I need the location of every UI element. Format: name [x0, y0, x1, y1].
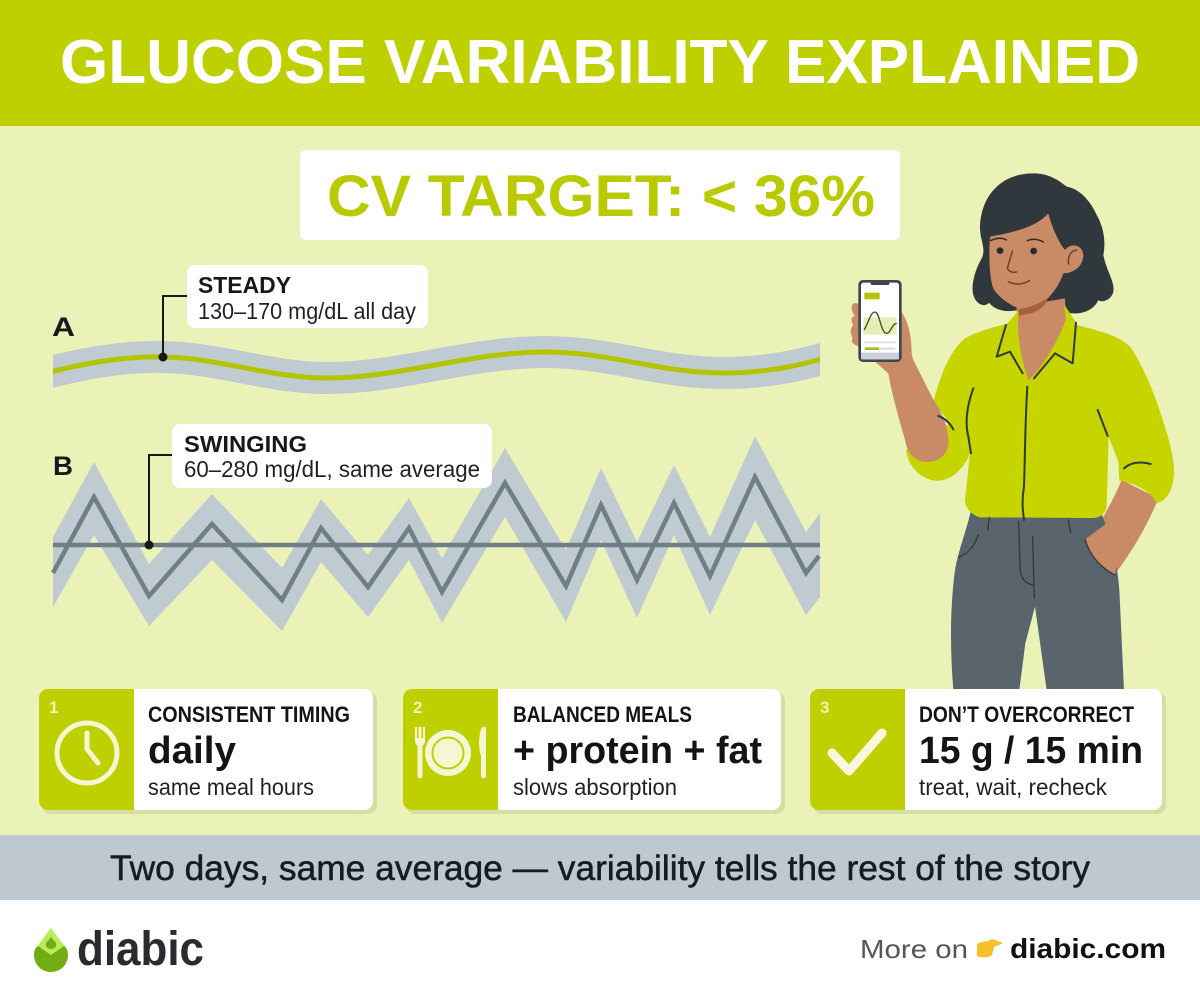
facial features [991, 238, 1077, 284]
card 3: don't overcorrect: DON’T OVERCORRECT [919, 702, 1134, 727]
right forearm [1088, 480, 1158, 572]
callout: swinging: SWINGING [184, 431, 307, 457]
connector A [163, 296, 187, 357]
face [989, 213, 1083, 308]
swinging line [53, 477, 819, 600]
icon: pointing hand [977, 939, 1003, 957]
steady band [30, 350, 850, 378]
neck [1017, 298, 1066, 380]
card 1: consistent timing: daily [148, 730, 236, 772]
trousers [951, 512, 1124, 690]
callout: swinging: 60–280 mg/dL, same average [184, 456, 480, 482]
trouser seams [959, 517, 1115, 598]
title: GLUCOSE VARIABILITY EXPLAINED [60, 28, 1140, 97]
icon: plate and cutlery [415, 727, 486, 778]
number 2: 2 [413, 698, 422, 717]
card 2: balanced meals: BALANCED MEALS [513, 702, 692, 727]
icon: check mark [832, 733, 882, 771]
chart B: swinging glucose [53, 424, 820, 631]
callout: steady [187, 265, 428, 328]
hand in pocket [1085, 523, 1118, 575]
card 1: consistent timing [39, 689, 377, 814]
card 2: balanced meals: + protein + fat [513, 730, 762, 772]
icon: clock [57, 723, 117, 783]
more on link [860, 933, 1166, 964]
label B: B [53, 451, 73, 481]
chin shadow [1018, 297, 1048, 315]
hair [973, 173, 1114, 313]
label A: A [52, 312, 75, 342]
connector B [149, 455, 172, 545]
card 1: consistent timing: CONSISTENT TIMING [148, 702, 350, 727]
card 2: balanced meals: slows absorption [513, 774, 677, 800]
card 3: don't overcorrect: 15 g / 15 min [919, 730, 1143, 772]
shirt seams [938, 323, 1151, 520]
card 3: don't overcorrect [810, 689, 1166, 814]
card 3: don't overcorrect: treat, wait, recheck [919, 774, 1107, 800]
person holding phone [851, 173, 1174, 690]
more on link: More on [860, 934, 968, 964]
callout: swinging [172, 424, 492, 488]
number 3: 3 [820, 698, 829, 717]
more on link: diabic.com [1010, 933, 1166, 964]
CV target callout: CV TARGET: < 36% [327, 164, 875, 229]
footer [0, 900, 1200, 1000]
callout: steady: STEADY [198, 272, 291, 298]
left arm [888, 357, 948, 462]
takeaway bar: Two days, same average — variability tells the rest of the story [110, 849, 1091, 888]
chart A: steady glucose [30, 265, 850, 378]
number 1: 1 [49, 698, 58, 717]
CV target callout [300, 150, 900, 240]
callout: steady: 130–170 mg/dL all day [198, 298, 416, 324]
shirt [906, 323, 1174, 518]
average line [53, 543, 820, 547]
collar [997, 304, 1076, 382]
phone hand [851, 303, 915, 375]
steady line [30, 350, 850, 378]
header band [0, 0, 1200, 126]
phone [858, 280, 902, 362]
card 2: balanced meals [403, 689, 785, 814]
takeaway bar [0, 835, 1200, 900]
logo: diabic: diabic [77, 923, 204, 976]
swinging band [53, 436, 820, 631]
logo: diabic [34, 923, 204, 976]
card 1: consistent timing: same meal hours [148, 774, 314, 800]
